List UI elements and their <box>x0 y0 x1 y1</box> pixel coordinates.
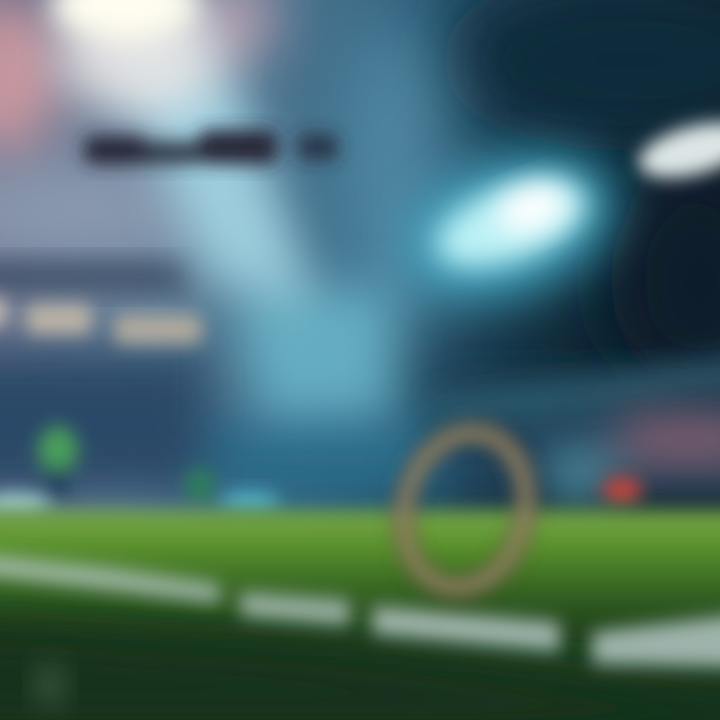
stand lights <box>0 298 202 344</box>
small green figure <box>186 468 214 502</box>
white pitch line <box>0 552 720 668</box>
floodlight top right <box>633 112 720 188</box>
dark foreground grass <box>0 620 720 720</box>
floodlight top left <box>0 0 280 150</box>
red figure <box>602 477 642 503</box>
cyan floodlight glow <box>387 126 637 327</box>
faint highlight in foreground grass <box>36 663 64 707</box>
stadium crowd band <box>0 350 720 500</box>
dark upper right sky <box>440 0 720 390</box>
light beam from top left <box>120 60 400 420</box>
green figure <box>38 426 78 496</box>
grass pitch <box>0 510 720 720</box>
ring on the pitch <box>387 418 543 602</box>
stand shadow on the left <box>0 262 190 292</box>
blue haze in the centre <box>0 10 450 350</box>
blurred headline text <box>84 130 338 164</box>
pitch edge highlights <box>0 491 280 517</box>
diagonal blue band on the right <box>430 350 720 430</box>
crowd colours on the right <box>550 415 720 500</box>
